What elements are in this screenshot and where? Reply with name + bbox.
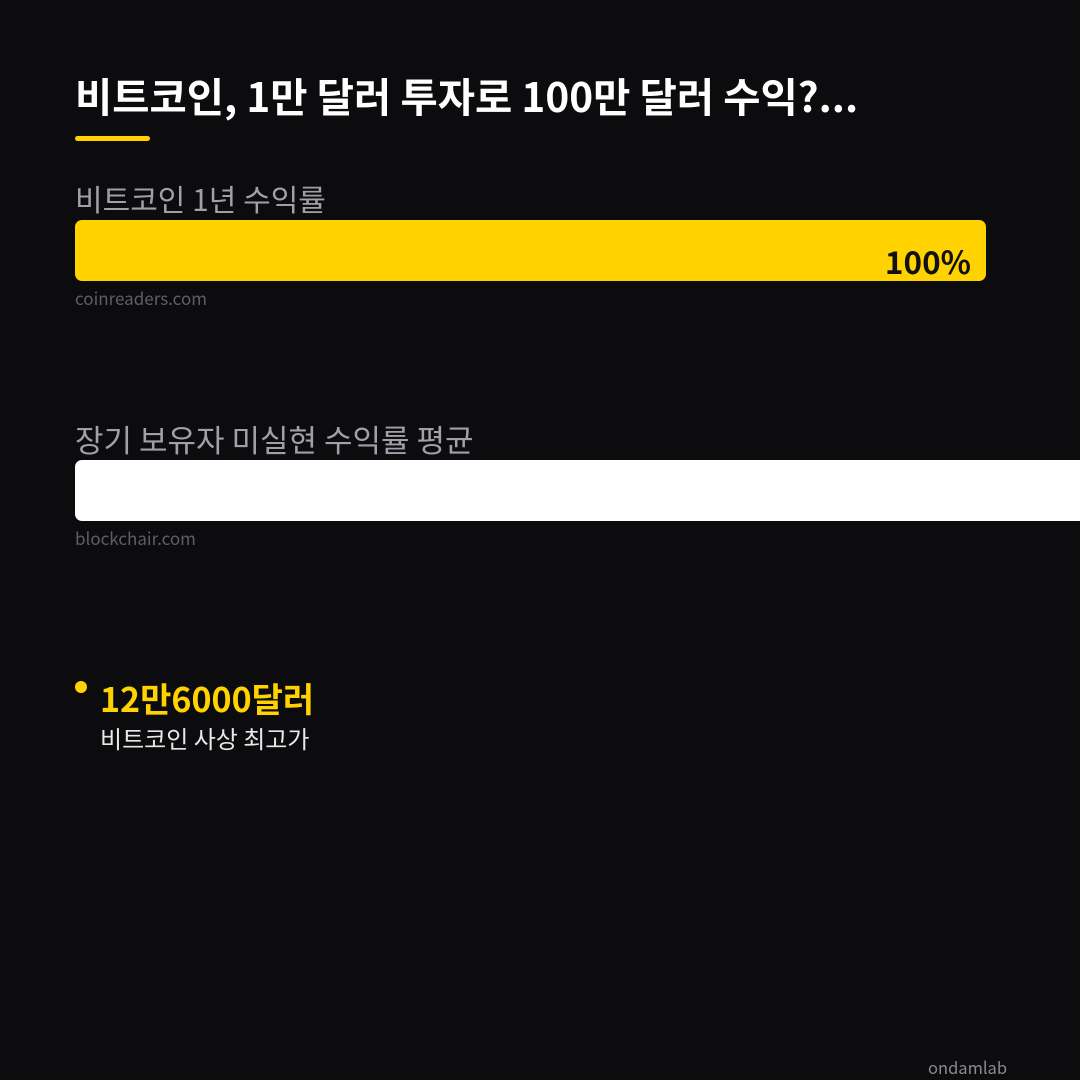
bar value: 100%	[885, 238, 971, 284]
caption: 비트코인 사상 최고가	[100, 720, 309, 755]
source: coinreaders: coinreaders.com	[75, 285, 207, 310]
bar: 100%	[75, 220, 986, 281]
source: blockchair: blockchair.com	[75, 525, 196, 550]
footer credit: ondamlab	[928, 1055, 1007, 1079]
label: bitcoin 1-year return: 비트코인 1년 수익률	[75, 176, 326, 220]
bullet: all-time high	[75, 673, 314, 755]
title underline accent	[75, 136, 150, 141]
title: 비트코인, 1만 달러 투자로 100만 달러 수익?...	[75, 65, 858, 124]
value: 12만6000달러	[100, 673, 314, 722]
label: long-term holder unrealized return: 장기 보유자 미실현 수익률 평균	[75, 416, 474, 461]
bar: white	[75, 460, 1080, 521]
bullet dot	[75, 681, 87, 693]
